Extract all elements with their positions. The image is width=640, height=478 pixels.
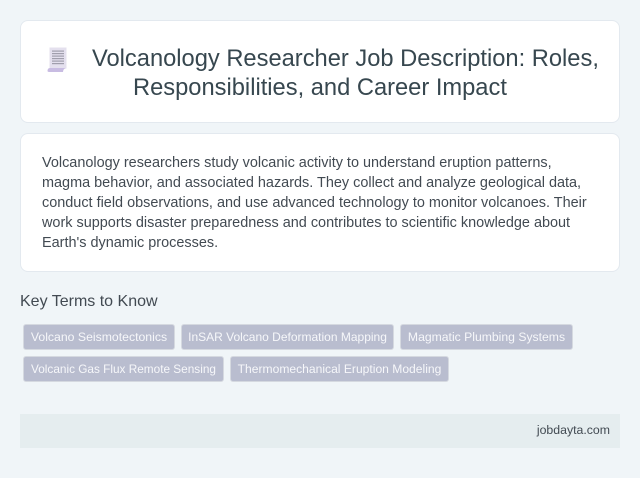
tag: InSAR Volcano Deformation Mapping xyxy=(188,330,387,344)
tags xyxy=(23,324,573,382)
description text: Earth's dynamic processes. xyxy=(42,235,218,251)
description text xyxy=(42,155,587,251)
tag xyxy=(400,324,573,350)
tag: Magmatic Plumbing Systems xyxy=(408,330,565,344)
tag: Thermomechanical Eruption Modeling xyxy=(238,362,441,376)
title: Responsibilities, and Career Impact xyxy=(133,75,507,101)
tag xyxy=(23,324,175,350)
heading: key terms: Key Terms to Know xyxy=(20,293,158,310)
tag xyxy=(230,356,449,382)
tag: Volcano Seismotectonics xyxy=(31,330,167,344)
icon: document xyxy=(48,48,66,72)
description text: magma behavior, and associated hazards. They collect and analyze geological data, xyxy=(42,175,581,191)
description text: work supports disaster preparedness and contributes to scientific knowledge about xyxy=(42,215,570,231)
panel: title card xyxy=(20,20,620,123)
tag xyxy=(181,324,394,350)
description text: Volcanology researchers study volcanic activity to understand eruption patterns, xyxy=(42,155,552,171)
description text: conduct field observations, and use advanced technology to monitor volcanoes. Their xyxy=(42,195,587,211)
title xyxy=(92,46,599,101)
footer source text: jobdayta.com xyxy=(537,423,610,437)
tag xyxy=(23,356,224,382)
title: Volcanology Researcher Job Description: Roles, xyxy=(92,46,599,72)
footer xyxy=(20,414,620,448)
panel: description card xyxy=(20,133,620,272)
tag: Volcanic Gas Flux Remote Sensing xyxy=(31,362,216,376)
